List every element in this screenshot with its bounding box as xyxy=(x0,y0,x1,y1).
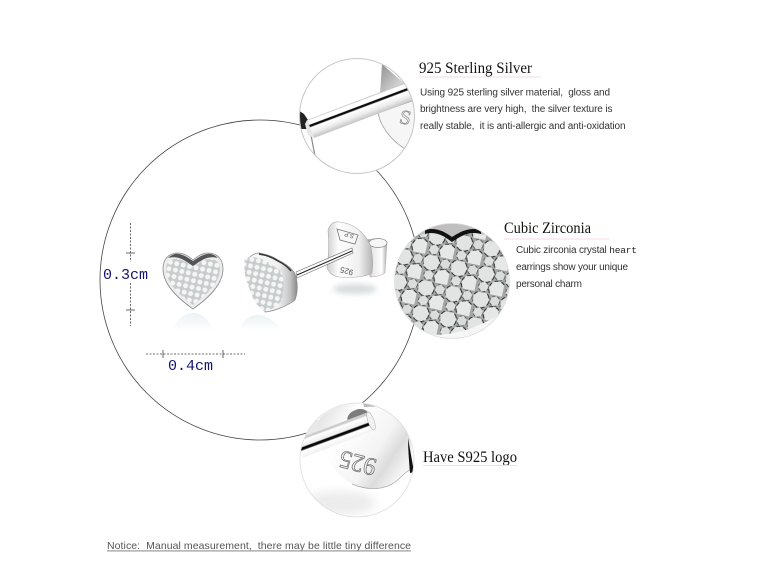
width dimension line xyxy=(146,350,245,358)
earring side view with post and back: S.P xyxy=(344,230,355,238)
heading: Cubic Zirconia: Cubic Zirconia xyxy=(504,220,591,237)
earring front view xyxy=(163,253,223,331)
description: Cubic Zirconia: Cubic zirconia crystal heart xyxy=(516,245,637,256)
height label: 0.3cm xyxy=(103,267,148,284)
underline: Cubic Zirconia xyxy=(504,238,609,240)
detail circle: cubic zirconia xyxy=(393,223,511,344)
description: Cubic Zirconia: earrings show your unique xyxy=(516,262,628,273)
description: Cubic Zirconia: personal charm xyxy=(516,279,582,290)
description: 925 Sterling Silver xyxy=(420,88,626,132)
description: 925 Sterling Silver: brightness are very high, the silver texture is xyxy=(420,104,612,115)
detail circle: silver post xyxy=(299,58,415,174)
detail circle: S925 logo: 925 xyxy=(337,445,379,480)
earring side view with post and back xyxy=(240,222,387,331)
underline: 925 Sterling Silver xyxy=(419,76,541,78)
detail circle: silver post: S xyxy=(398,106,413,130)
heading: Have S925 logo: Have S925 logo xyxy=(423,449,517,466)
notice: Notice: Manual measurement, there may be little tiny difference xyxy=(107,540,411,552)
width label: 0.4cm xyxy=(168,358,213,375)
heading: 925 Sterling Silver: 925 Sterling Silver xyxy=(419,60,533,77)
height dimension line xyxy=(126,223,135,326)
description: Cubic Zirconia xyxy=(516,245,637,290)
detail circle: S925 logo xyxy=(296,402,414,518)
description: 925 Sterling Silver: really stable, it is anti-allergic and anti-oxidation xyxy=(420,121,626,132)
earring side view with post and back: 925 xyxy=(339,265,354,277)
large dimension circle xyxy=(100,120,420,440)
description: 925 Sterling Silver: Using 925 sterling silver material, gloss and xyxy=(420,88,610,98)
underline: Have S925 logo xyxy=(423,465,517,466)
